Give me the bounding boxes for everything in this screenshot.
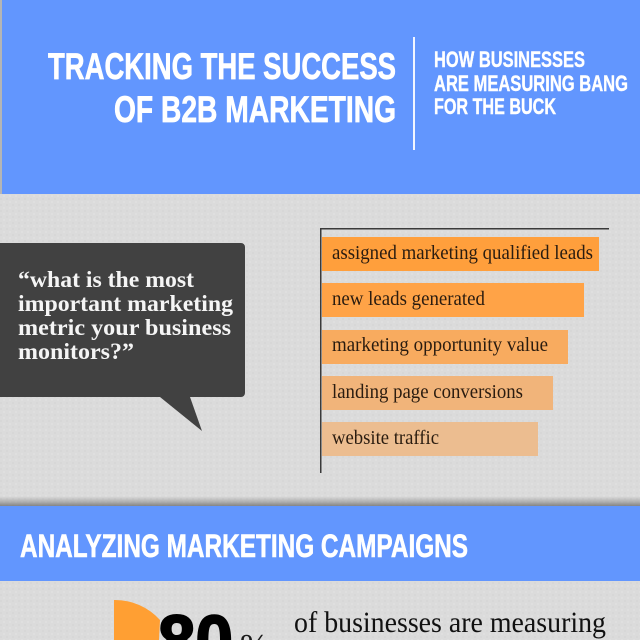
bar: landing page conversions: landing page conversions <box>332 382 523 403</box>
bar: assigned marketing qualified leads <box>322 237 599 271</box>
bar: assigned marketing qualified leads: assigned marketing qualified leads <box>332 243 593 264</box>
title: TRACKING THE SUCCESS <box>48 46 396 87</box>
bar: new leads generated: new leads generated <box>332 289 485 310</box>
title <box>48 46 396 130</box>
question text: monitors?” <box>18 339 134 365</box>
callout: survey question speech bubble <box>0 243 245 431</box>
bar: website traffic: website traffic <box>332 428 439 449</box>
panel: section band <box>0 496 640 581</box>
title: OF B2B MARKETING <box>114 89 396 130</box>
subtitle: HOW BUSINESSES <box>434 47 585 72</box>
divider <box>413 37 415 150</box>
subtitle <box>434 47 628 119</box>
panel: header banner <box>0 0 640 194</box>
bar chart: marketing metrics ranking <box>320 228 609 473</box>
text: stat description: of businesses are measuring <box>294 607 606 639</box>
question text <box>18 267 233 365</box>
question text: metric your business <box>18 315 231 341</box>
question text: “what is the most <box>18 267 194 293</box>
subtitle: FOR THE BUCK <box>434 94 556 119</box>
bar: new leads generated <box>322 283 584 317</box>
bar: website traffic <box>322 422 538 456</box>
section heading: ANALYZING MARKETING CAMPAIGNS <box>20 528 468 564</box>
bar: marketing opportunity value: marketing opportunity value <box>332 335 548 356</box>
question text: important marketing <box>18 291 233 317</box>
icon: orange pie segment <box>114 600 160 640</box>
bar: marketing opportunity value <box>322 330 568 364</box>
bar: landing page conversions <box>322 376 553 410</box>
